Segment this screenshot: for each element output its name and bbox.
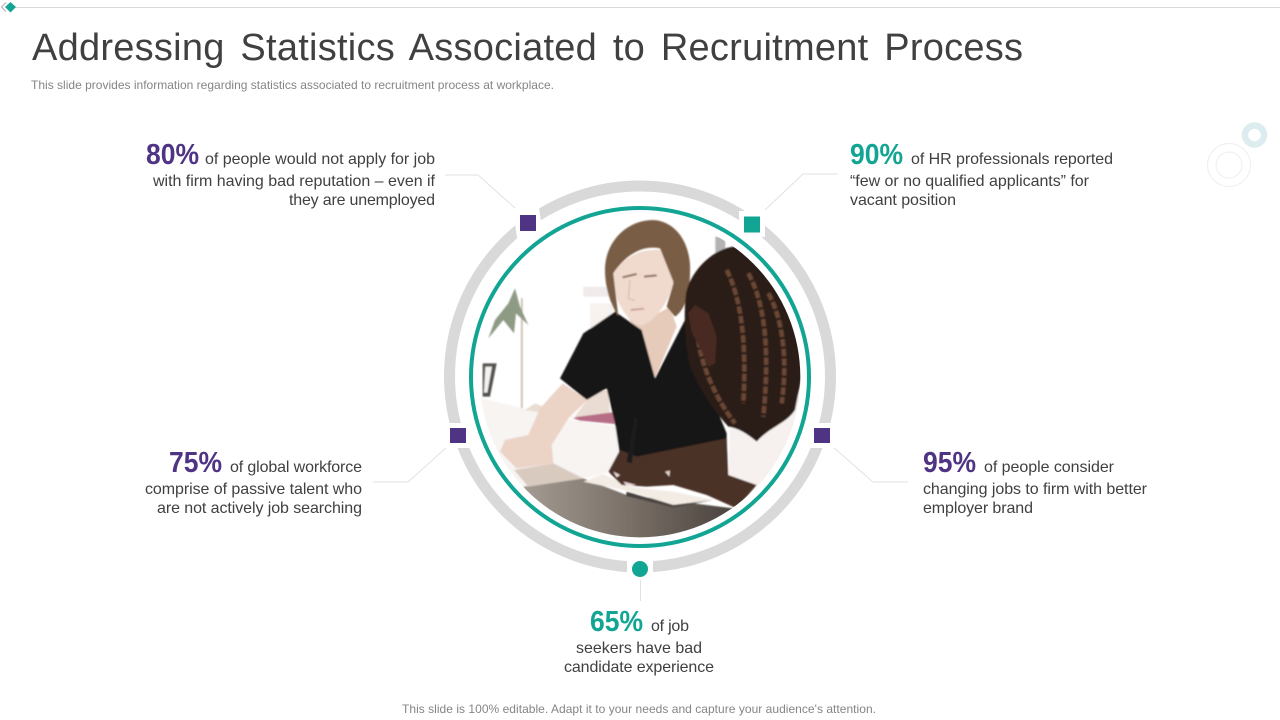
stat: 95%: changing jobs to firm with better: [923, 481, 1148, 498]
stat: 80%: with firm having bad reputation – even if: [152, 173, 436, 190]
stat: 65%: 65%: [590, 606, 643, 638]
hair highlights: [698, 270, 784, 423]
inner teal ring: [471, 208, 809, 546]
notebook: [583, 474, 713, 505]
woman shirt: [728, 387, 803, 503]
man hair back: [605, 220, 690, 317]
stat: 75%: comprise of passive talent who: [145, 481, 362, 498]
node: right square: [807, 423, 837, 448]
stat: 95%: 95%: [923, 447, 976, 479]
white tablecloth and papers: [473, 397, 620, 487]
stat: 80%: they are unemployed: [289, 192, 435, 209]
stat: 75%: are not actively job searching: [157, 500, 362, 517]
top rule with diamond marker: [2, 2, 1280, 12]
stat: 75%: 75%: [169, 447, 222, 479]
table: [523, 478, 733, 538]
leader lines: [373, 174, 908, 601]
pen: [626, 453, 634, 464]
woman hair: [685, 247, 802, 442]
photo: two colleagues at a table: [473, 213, 807, 547]
node: top-left square: [513, 208, 543, 238]
title: Addressing Statistics Associated to Recruitment Process: [32, 27, 1023, 69]
stat: 80%: of people would not apply for job: [205, 151, 435, 168]
stat: 95%: employer brand: [923, 500, 1033, 517]
footer note: This slide is 100% editable. Adapt it to your needs and capture your audience's attention.: [402, 702, 876, 716]
node: bottom circle: [627, 558, 653, 580]
stat: 90%: “few or no qualified applicants” for: [850, 173, 1090, 190]
stat: 65%: of job: [651, 618, 689, 635]
stat: 65%: seekers have bad: [576, 640, 702, 657]
man face: [613, 250, 673, 326]
stat: 90%: 90%: [850, 139, 903, 171]
stat: 75%: of global workforce: [230, 459, 362, 476]
stat: 80%: [146, 139, 436, 209]
decorative circles: [1208, 126, 1264, 186]
woman face: [688, 305, 717, 367]
stat: 65%: [564, 606, 714, 676]
node: top-right square: [739, 211, 765, 237]
man arm and hand: [500, 383, 587, 468]
stat: 95%: of people consider: [984, 459, 1115, 476]
outer grey ring: [450, 186, 830, 567]
stat: 80%: 80%: [146, 139, 199, 171]
stat: 75%: [145, 447, 362, 517]
man neck: [625, 307, 677, 378]
tablet: [514, 463, 583, 487]
plant: [521, 298, 523, 408]
stat: 90%: vacant position: [850, 192, 956, 209]
man shirt: [560, 312, 727, 457]
stat: 65%: candidate experience: [564, 659, 714, 676]
stat: 95%: [923, 447, 1148, 517]
stat: 90%: of HR professionals reported: [911, 151, 1113, 168]
node: left square: [443, 423, 473, 448]
woman arm: [608, 438, 757, 508]
subtitle: This slide provides information regarding statistics associated to recruitment process at workplace.: [31, 78, 554, 92]
stat: 90%: [850, 139, 1113, 209]
